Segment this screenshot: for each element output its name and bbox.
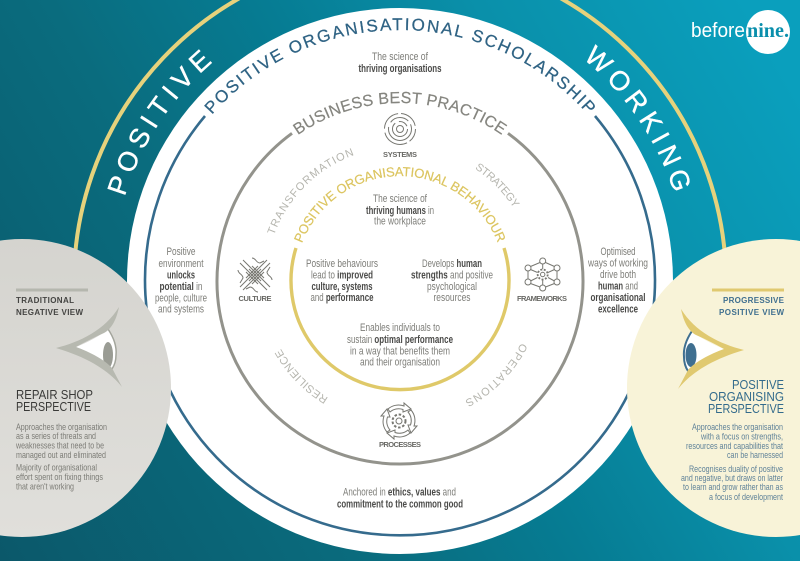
icon: processes <box>379 403 421 449</box>
text: repair shop description: managed out and eliminated <box>16 450 106 461</box>
text: repair shop description <box>15 422 107 492</box>
heading: POSITIVE: POSITIVE <box>107 49 212 195</box>
text: optimised ways of working: excellence <box>598 304 638 316</box>
icon: systems: SYSTEMS <box>383 150 417 159</box>
text: enables individuals: Enables individuals to <box>360 322 440 334</box>
text: positive environment: people, culture <box>155 292 207 304</box>
icon: positive eye <box>678 309 744 389</box>
panel: traditional negative view <box>0 239 171 537</box>
outer gold arc <box>74 0 726 300</box>
grey ring: business best practice <box>217 133 583 464</box>
yellow ring: positive organisational behaviour <box>291 248 509 390</box>
text: positive environment: Positive <box>166 246 196 258</box>
text: positive environment: unlocks <box>167 270 195 282</box>
panel: progressive positive view <box>627 239 800 537</box>
text: optimised ways of working <box>587 246 648 316</box>
label: strategy: STRATEGY <box>476 164 520 206</box>
text: develops human strengths <box>411 258 493 304</box>
text: science of thriving humans: the workplace <box>374 216 426 228</box>
heading: positive organising perspective: PERSPECTIVE <box>708 401 784 416</box>
text: positive environment <box>155 246 207 316</box>
text: positive behaviours: Positive behaviours <box>306 258 378 270</box>
text: repair shop description: as a series of threats and <box>16 431 96 442</box>
text: positive behaviours: culture, systems <box>312 281 372 293</box>
text: anchored in ethics <box>337 486 463 510</box>
text: repair shop description: effort spent on fixing things <box>16 472 103 483</box>
text: positive organising description <box>681 422 783 503</box>
text: develops human strengths: psychological <box>427 281 477 293</box>
text: science of thriving organisations: The science of <box>372 51 429 63</box>
divider bar <box>16 288 88 292</box>
text: optimised ways of working: ways of working <box>587 258 648 270</box>
text: positive behaviours <box>306 258 378 304</box>
heading: repair shop perspective <box>16 387 93 414</box>
heading: repair shop perspective: REPAIR SHOP <box>16 387 93 402</box>
heading: positive organisational scholarship: POSITIVE ORGANISATIONAL SCHOLARSHIP <box>204 18 595 114</box>
heading: positive organising perspective <box>708 377 784 416</box>
label: transformation: TRANSFORMATION <box>267 148 354 232</box>
text: enables individuals: in a way that benefits them <box>350 346 450 358</box>
icon: processes: PROCESSES <box>379 440 421 449</box>
text: enables individuals <box>347 322 453 368</box>
icon: frameworks <box>517 258 567 303</box>
icon: culture: CULTURE <box>238 294 272 303</box>
logo: before nine: before <box>691 20 745 42</box>
text: develops human strengths: Develops human <box>422 258 482 270</box>
logo: before nine: nine. <box>747 20 789 42</box>
label: progressive positive view: POSITIVE VIEW <box>719 308 784 317</box>
icon: culture <box>238 258 272 303</box>
label: progressive positive view <box>719 296 785 317</box>
heading: repair shop perspective: PERSPECTIVE <box>16 399 91 414</box>
icon: frameworks: FRAMEWORKS <box>517 294 567 303</box>
text: positive environment: environment <box>158 258 204 270</box>
text: positive behaviours: and performance <box>310 292 374 304</box>
text: develops human strengths: strengths and positive <box>411 270 493 282</box>
label: traditional negative view: TRADITIONAL <box>16 296 74 305</box>
text: anchored in ethics: Anchored in ethics, values and <box>343 486 456 498</box>
label: progressive positive view: PROGRESSIVE <box>723 296 785 305</box>
heading: WORKING: WORKING <box>587 44 690 190</box>
text: develops human strengths: resources <box>434 292 471 304</box>
text: positive environment: potential in <box>160 281 202 293</box>
text: repair shop description: weaknesses that need to be <box>15 440 104 452</box>
heading: business best practice: BUSINESS BEST PRACTICE <box>292 92 508 135</box>
label: resilience: RESILIENCE <box>274 349 328 404</box>
text: anchored in ethics: commitment to the common good <box>337 498 463 510</box>
label: operations: OPERATIONS <box>466 344 526 406</box>
label: traditional negative view: NEGATIVE VIEW <box>16 308 83 317</box>
text: optimised ways of working: Optimised <box>600 246 636 258</box>
icon: negative eye <box>56 307 122 387</box>
heading: positive organisational behaviour: POSITIVE ORGANISATIONAL BEHAVIOUR <box>294 167 505 242</box>
heading: positive organising perspective: ORGANISING <box>709 389 784 404</box>
text: repair shop description: Majority of organisational <box>16 462 97 474</box>
text: enables individuals: and their organisation <box>360 356 440 368</box>
text: positive behaviours: lead to improved <box>311 270 373 282</box>
text: science of thriving organisations: thriving organisations <box>358 63 442 75</box>
text: science of thriving humans <box>366 193 434 228</box>
text: optimised ways of working: human and <box>598 280 638 292</box>
text: enables individuals: sustain optimal performance <box>347 334 453 346</box>
label: traditional negative view <box>16 296 83 317</box>
logo: before nine <box>691 10 790 54</box>
icon: systems <box>383 114 417 159</box>
text: repair shop description: that aren't working <box>16 482 74 492</box>
text: optimised ways of working: drive both <box>600 269 636 281</box>
white central circle <box>127 8 673 554</box>
text: science of thriving organisations <box>358 51 442 75</box>
blue ring: scholarship <box>145 116 655 535</box>
text: science of thriving humans: thriving humans in <box>366 205 434 217</box>
text: science of thriving humans: The science of <box>373 193 428 205</box>
text: repair shop description: Approaches the organisation <box>16 422 107 433</box>
text: positive environment: and systems <box>158 304 204 316</box>
divider bar <box>712 288 784 292</box>
text: optimised ways of working: organisational <box>590 292 646 304</box>
heading: positive organising perspective: POSITIVE <box>732 377 784 392</box>
